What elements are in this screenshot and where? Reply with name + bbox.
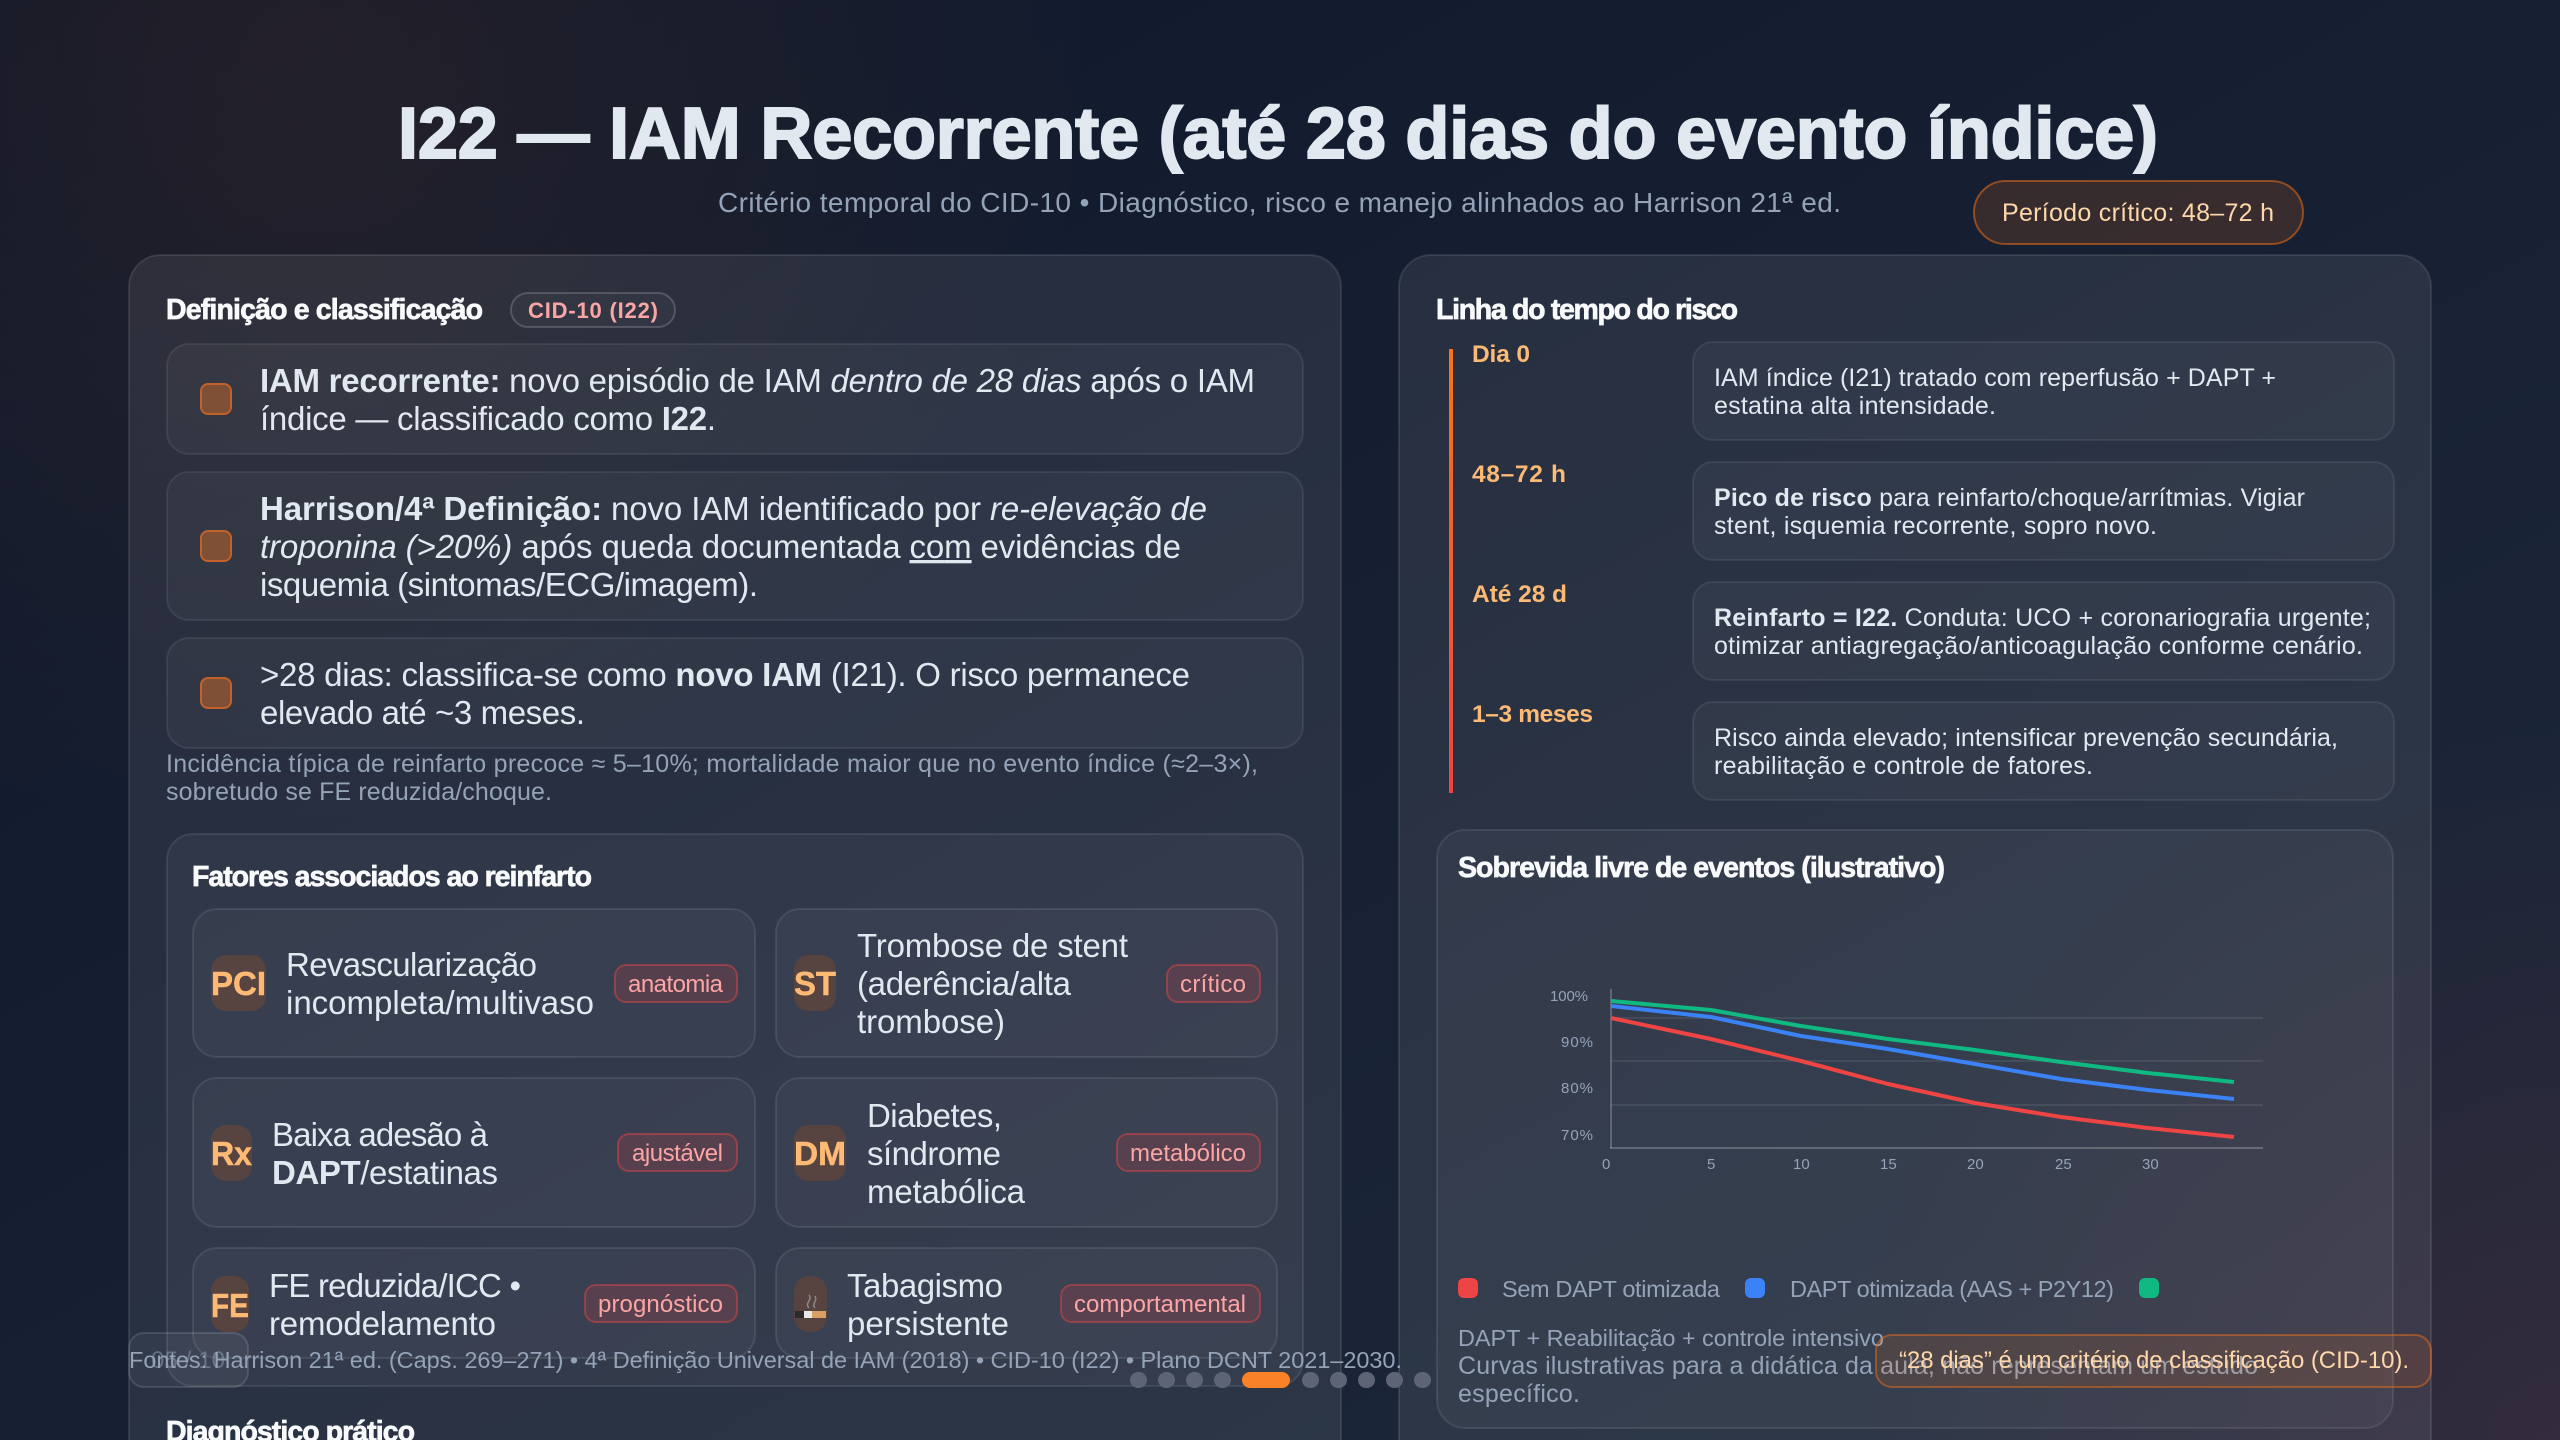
legend: Sem DAPT otimizada	[1502, 1276, 1721, 1302]
progress dots	[1130, 1372, 1431, 1388]
page number: 05 / 10	[151, 1347, 225, 1374]
icon: cigarette	[795, 1295, 826, 1318]
chart note: específico.	[1458, 1380, 1580, 1408]
title: I22 — IAM Recorrente (até 28 dias do evento índice)	[398, 94, 2158, 174]
page number	[129, 1333, 248, 1387]
factor: Rx	[193, 1078, 755, 1227]
factor: tabagismo: comportamental	[1074, 1291, 1246, 1318]
badge: período crítico: Período crítico: 48–72 h	[2002, 199, 2274, 227]
line chart	[1550, 988, 2263, 1173]
badge: período crítico	[1974, 181, 2303, 244]
timeline: até 28 d: Até 28 d	[1472, 581, 1567, 608]
callout: 28 dias	[1876, 1335, 2431, 1387]
factor: FE: FE	[211, 1287, 249, 1324]
factor: FE: FE reduzida/ICC •	[269, 1267, 521, 1304]
heading: definição: Definição e classificação	[166, 294, 483, 326]
heading: sobrevida: Sobrevida livre de eventos (ilustrativo)	[1458, 852, 1945, 884]
callout: 28 dias: “28 dias” é um critério de classificação (CID-10).	[1899, 1347, 2409, 1374]
legend: DAPT otimizada (AAS + P2Y12)	[1790, 1276, 2114, 1302]
factor: ST: trombose)	[857, 1003, 1005, 1040]
factor: ST: (aderência/alta	[857, 965, 1072, 1002]
line chart: 20	[1967, 1156, 1984, 1173]
timeline: até 28 d: Reinfarto = I22. Conduta: UCO + coronariografia urgente;	[1714, 604, 2371, 632]
factor: PCI: anatomia	[628, 971, 724, 998]
definition card 3: >28 dias: classifica-se como novo IAM (I21). O risco permanece	[260, 656, 1190, 693]
definition card 1: IAM recorrente: novo episódio de IAM dentro de 28 dias após o IAM	[260, 362, 1255, 399]
factor: FE: remodelamento	[269, 1305, 496, 1342]
factor: ST: Trombose de stent	[857, 927, 1128, 964]
factor: PCI: PCI	[211, 965, 266, 1002]
legend	[1458, 1276, 2159, 1351]
factor: PCI: incompleta/multivaso	[286, 984, 594, 1021]
chart note: Curvas ilustrativas para a didática da aula, não representam um estudo	[1458, 1352, 2258, 1380]
factor: Rx: DAPT/estatinas	[272, 1154, 498, 1191]
panel: fatores associados	[167, 834, 1303, 1386]
factor: Rx: ajustável	[632, 1140, 723, 1167]
note: incidência	[166, 750, 1258, 806]
badge: CID-10	[511, 293, 675, 327]
line chart: 30	[2142, 1156, 2159, 1173]
line chart: 90%	[1561, 1034, 1593, 1051]
timeline: 1–3 meses: Risco ainda elevado; intensificar prevenção secundária,	[1714, 724, 2338, 752]
line chart: 0	[1602, 1156, 1610, 1173]
timeline: dia 0: estatina alta intensidade.	[1714, 392, 1996, 420]
timeline: dia 0: IAM índice (I21) tratado com reperfusão + DAPT +	[1714, 364, 2276, 392]
factor: DM: metabólica	[867, 1173, 1026, 1210]
factor: tabagismo: persistente	[847, 1305, 1009, 1342]
definition card 2	[167, 472, 1303, 620]
note: incidência: Incidência típica de reinfarto precoce ≈ 5–10%; mortalidade maior que no evento índice (≈2–3×),	[166, 750, 1258, 778]
timeline: 48–72 h	[1472, 461, 2394, 560]
factor: tabagismo: Tabagismo	[847, 1267, 1003, 1304]
factor: tabagismo	[776, 1248, 1277, 1358]
line chart: 70%	[1561, 1127, 1593, 1144]
note: incidência: sobretudo se FE reduzida/choque.	[166, 778, 552, 806]
panel: linha do tempo e gráfico	[1399, 255, 2431, 1440]
definition card 1: índice — classificado como I22.	[260, 400, 716, 437]
factor: FE	[193, 1248, 755, 1358]
definition card 2: Harrison/4ª Definição: novo IAM identificado por re-elevação de	[260, 490, 1207, 527]
timeline: 48–72 h: stent, isquemia recorrente, sopro novo.	[1714, 512, 2157, 540]
line chart: 10	[1793, 1156, 1810, 1173]
heading: linha do tempo: Linha do tempo do risco	[1436, 294, 1738, 326]
factor: DM	[776, 1078, 1277, 1227]
timeline: 48–72 h: Pico de risco para reinfarto/choque/arrítmias. Vigiar	[1714, 484, 2305, 512]
factor: DM: DM	[794, 1135, 846, 1172]
subtitle: Critério temporal do CID-10 • Diagnóstico, risco e manejo alinhados ao Harrison 21ª ed.	[718, 187, 1841, 218]
timeline: até 28 d: otimizar antiagregação/anticoagulação conforme cenário.	[1714, 632, 2363, 660]
timeline: dia 0	[1472, 341, 2394, 440]
factor: ST: ST	[794, 965, 836, 1002]
line chart: 100%	[1550, 988, 1588, 1005]
factor: Rx: Rx	[211, 1135, 253, 1172]
chart note	[1458, 1352, 2258, 1408]
timeline: 1–3 meses: 1–3 meses	[1472, 701, 1593, 728]
timeline rail	[1449, 349, 1453, 793]
line chart: 15	[1880, 1156, 1897, 1173]
line chart: 5	[1707, 1156, 1715, 1173]
badge: CID-10: CID-10 (I22)	[528, 298, 658, 323]
factor: DM: metabólico	[1130, 1140, 1246, 1167]
line chart: 25	[2055, 1156, 2072, 1173]
definition card 1	[167, 344, 1303, 454]
factor: DM: Diabetes,	[867, 1097, 1002, 1134]
definition card 2: troponina (>20%) após queda documentada com evidências de	[260, 528, 1181, 565]
sources footer: Fontes: Harrison 21ª ed. (Caps. 269–271) • 4ª Definição Universal de IAM (2018) • CID-10 (I22) • Plano DCNT 2021–2030.	[129, 1347, 1402, 1373]
timeline: 1–3 meses	[1472, 701, 2394, 800]
factor: Rx: Baixa adesão à	[272, 1116, 489, 1153]
factor: PCI	[193, 909, 755, 1057]
factor: FE: prognóstico	[598, 1291, 723, 1318]
timeline: dia 0: Dia 0	[1472, 341, 1530, 368]
legend: DAPT + Reabilitação + controle intensivo	[1458, 1325, 1884, 1351]
timeline: 48–72 h: 48–72 h	[1472, 461, 1566, 488]
factor: PCI: Revascularização	[286, 946, 537, 983]
line chart: 80%	[1561, 1080, 1593, 1097]
heading: fatores: Fatores associados ao reinfarto	[192, 861, 592, 893]
panel: definição e classificação	[129, 255, 1341, 1440]
panel: sobrevida	[1437, 830, 2393, 1428]
timeline: 1–3 meses: reabilitação e controle de fatores.	[1714, 752, 2093, 780]
factor: DM: síndrome	[867, 1135, 1001, 1172]
timeline: até 28 d	[1472, 581, 2394, 680]
factor: ST	[776, 909, 1277, 1057]
definition card 3: elevado até ~3 meses.	[260, 694, 585, 731]
definition card 2: isquemia (sintomas/ECG/imagem).	[260, 566, 758, 603]
factor: ST: crítico	[1180, 971, 1246, 998]
definition card 3	[167, 638, 1303, 748]
